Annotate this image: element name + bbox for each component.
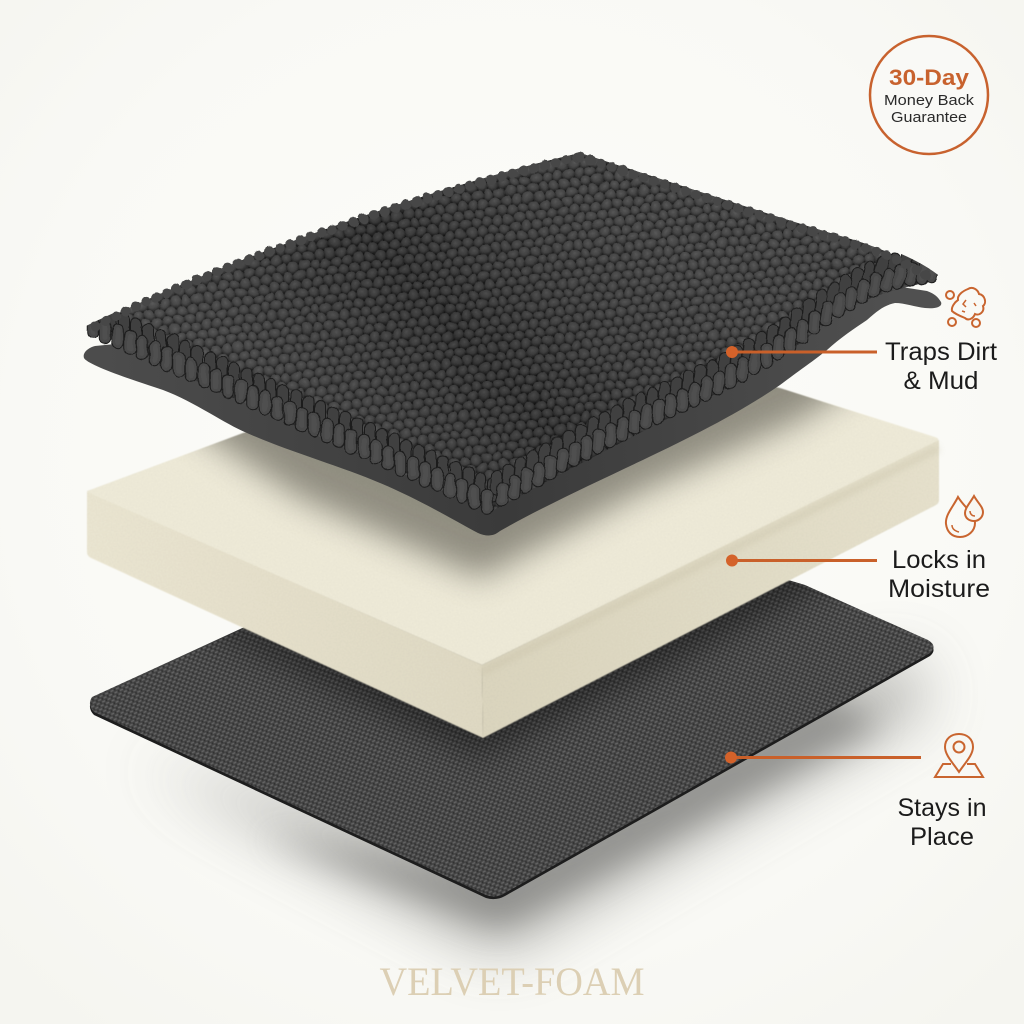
brand wordmark: VELVET-FOAM: [380, 959, 644, 1004]
badge ring: [870, 36, 988, 154]
badge text: Money Back: [884, 92, 975, 109]
badge: 30-day guarantee: [870, 36, 988, 154]
label: locks in moisture: Locks in: [892, 546, 986, 574]
foam left side: [87, 492, 483, 738]
foam top face: [87, 340, 938, 665]
tufts: back edges: [96, 157, 932, 326]
tufts: edge rows: [93, 252, 934, 508]
callout line: [732, 350, 877, 354]
callout dot: [726, 554, 738, 566]
icon: water drops: [946, 496, 983, 537]
foam right side: [482, 440, 939, 738]
label: locks in moisture: Moisture: [888, 575, 990, 603]
icon: dirt clump: [946, 288, 985, 327]
tufts: back row along front edges: [99, 252, 928, 496]
label: stays in place: Place: [910, 823, 974, 851]
drop shadow beneath base sheet: [140, 660, 930, 950]
label: stays in place: Stays in: [898, 794, 986, 822]
callout dot: [726, 346, 738, 358]
foam shadow from the mat: [194, 387, 852, 594]
foam edge crease: [482, 448, 939, 672]
icon: map pin: [935, 734, 983, 777]
callout: traps dirt: [726, 288, 997, 395]
foam grain: [80, 330, 950, 750]
callout line: [732, 756, 921, 759]
layer: memory foam block: [86, 386, 940, 738]
badge headline: 30-Day: [889, 65, 970, 90]
tufts: front row along front edges: [93, 264, 934, 508]
mat pile surface: [110, 154, 919, 510]
callout line: [732, 559, 877, 562]
badge text: Guarantee: [891, 109, 967, 126]
callout dot: [725, 752, 737, 764]
layer: non-slip base sheet: [90, 580, 934, 900]
label: traps dirt: & Mud: [904, 367, 978, 395]
mat backing: [84, 286, 941, 535]
callout: stays in place: [725, 734, 986, 851]
layer: chenille microfiber mat: [60, 130, 960, 535]
callout: locks in moisture: [726, 496, 990, 603]
label: traps dirt: Traps Dirt: [885, 338, 997, 366]
